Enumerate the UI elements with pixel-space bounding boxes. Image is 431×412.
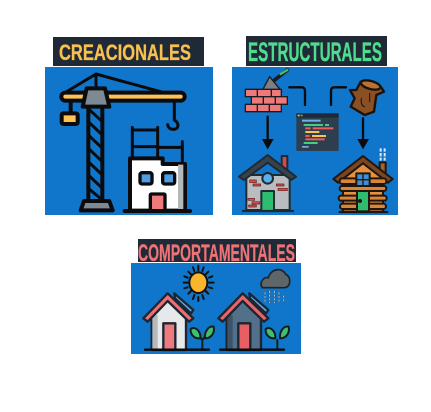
icon: rain cloud bbox=[261, 270, 290, 303]
icon: code window bbox=[296, 113, 339, 151]
panel background: estructurales bbox=[232, 67, 398, 215]
icon: plants bbox=[191, 327, 289, 349]
panel: estructurales bbox=[232, 36, 398, 215]
ground lines bbox=[145, 346, 284, 353]
heading: comportamentales bbox=[138, 239, 296, 267]
heading: comportamentales: COMPORTAMENTALES bbox=[138, 240, 295, 267]
icon: sun bbox=[184, 266, 214, 301]
panel: comportamentales bbox=[131, 239, 301, 354]
panel background: comportamentales bbox=[131, 263, 301, 354]
icon: house, sunny bbox=[143, 293, 193, 350]
heading: creacionales: CREACIONALES bbox=[59, 40, 191, 65]
icon: tower crane and building bbox=[61, 74, 190, 211]
panel: creacionales bbox=[45, 37, 213, 215]
illustration: houses in sun and rain bbox=[143, 266, 290, 350]
icon: wooden log bbox=[350, 79, 384, 115]
diagram: bricks, code, log and houses bbox=[239, 70, 393, 212]
arrows: connectors bbox=[268, 87, 363, 140]
icon: log cabin bbox=[333, 148, 393, 212]
panel background: creacionales bbox=[45, 67, 213, 215]
icon: brick house bbox=[239, 155, 296, 211]
icon: trowel and bricks bbox=[245, 70, 287, 112]
icon: house, rainy bbox=[218, 293, 268, 350]
